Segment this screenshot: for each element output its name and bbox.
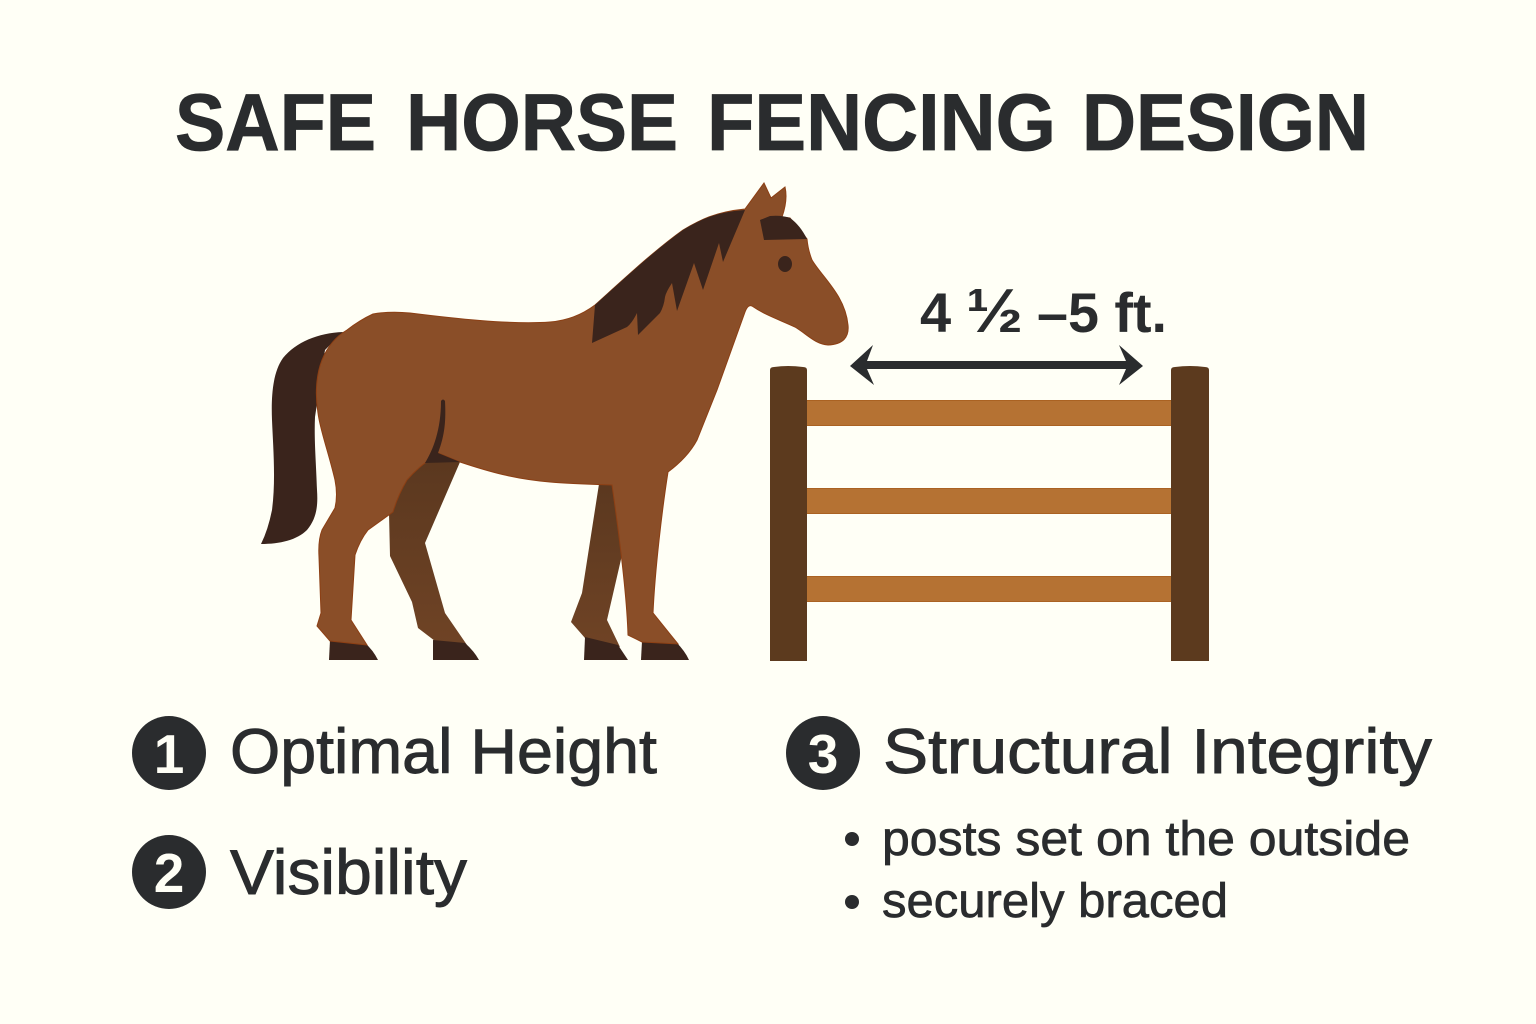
far hind leg [389,461,467,645]
double arrow [850,345,1143,385]
height label: 4 [920,281,951,344]
left post [770,366,807,661]
height label: –5 ft. [1037,281,1167,344]
hooves [329,637,689,660]
fence rails [806,400,1172,602]
badge 3 [786,716,860,790]
heading 2: Visibility [230,838,468,908]
horse body [316,183,848,645]
title: HORSE [406,78,678,168]
horse tail [261,332,343,544]
title [175,78,1369,168]
heading 1: Optimal Height [230,717,658,787]
icon: horse [261,183,848,660]
badge 1: 1 [154,723,184,785]
badge 2 [132,835,206,909]
horse eye [778,256,792,272]
badge 2: 2 [154,842,184,904]
horse mane [592,210,745,343]
bullet: braced: securely braced [882,875,1228,928]
bullet: posts: posts set on the outside [882,813,1410,866]
title: FENCING [707,78,1056,168]
fence [770,366,1209,661]
height label [920,277,1167,346]
badge 3: 3 [808,723,838,785]
far front leg [571,484,622,647]
heading 3: Structural Integrity [883,717,1433,787]
horse forelock [760,216,807,240]
title: SAFE [175,78,376,168]
height label: ½ [966,277,1023,346]
item 1: optimal height [132,716,658,790]
badge 1 [132,716,206,790]
title: DESIGN [1082,78,1369,168]
right post [1171,366,1209,661]
item 3: structural integrity [786,716,1433,928]
item 2: visibility [132,835,468,909]
flank crease [425,400,460,463]
